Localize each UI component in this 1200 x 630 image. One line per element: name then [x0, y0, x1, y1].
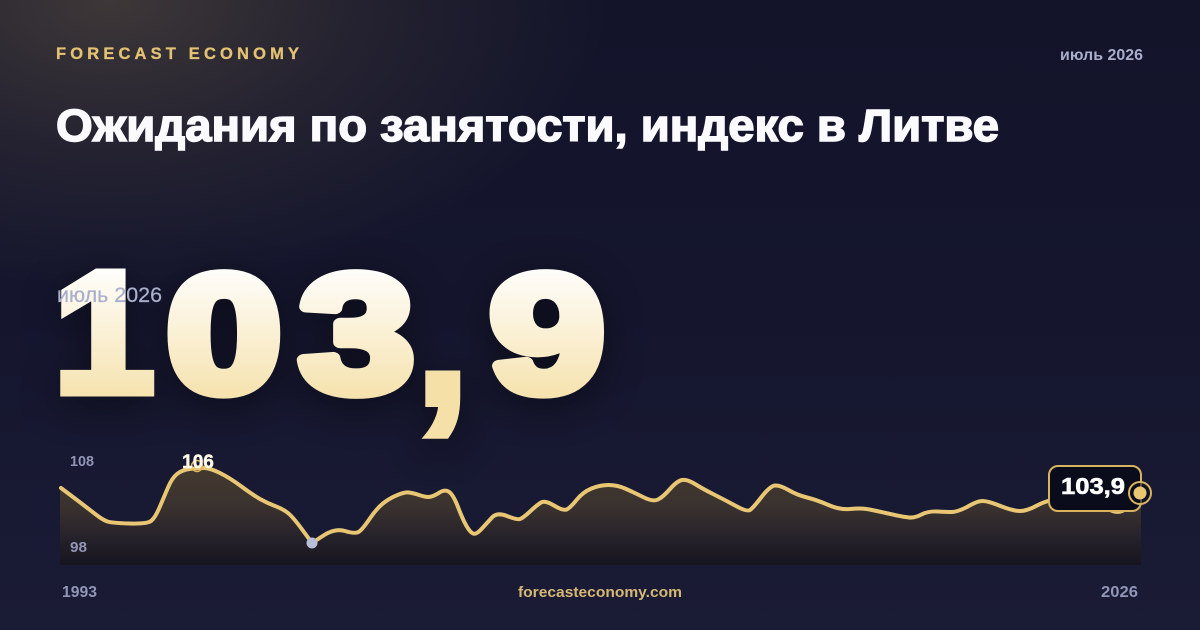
max value label: 106 [182, 452, 214, 473]
chart line [61, 468, 1140, 543]
axis label 98: 98 [70, 540, 87, 556]
min marker [306, 538, 318, 548]
current value marker [1129, 482, 1151, 504]
line chart [60, 452, 1151, 565]
big value: 3 [299, 241, 414, 427]
chart area fill [60, 468, 1141, 565]
current value badge [1049, 466, 1141, 511]
title: Ожидания по занятости, индекс в Литве [56, 100, 999, 151]
big value: 0 [167, 241, 281, 427]
source: forecasteconomy.com [518, 584, 682, 601]
current value badge: 103,9 [1061, 473, 1125, 499]
big value: , [414, 219, 471, 448]
start year: 1993 [62, 584, 97, 601]
big value: 1 [54, 235, 155, 429]
date top right: июль 2026 [1060, 47, 1143, 64]
axis label 108: 108 [70, 454, 94, 470]
big value [54, 219, 604, 448]
max marker ring [192, 460, 202, 472]
date over big value: июль 2026 [57, 284, 162, 307]
end year: 2026 [1101, 584, 1138, 601]
big value: 9 [490, 241, 604, 427]
brand label: FORECAST ECONOMY [56, 45, 299, 63]
